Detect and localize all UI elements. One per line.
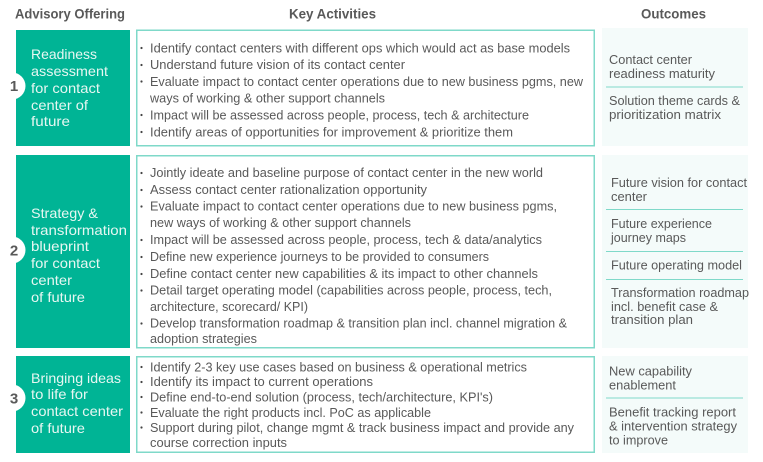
panel: key activities 1: Identify areas of opportunities for improvement & prioritize them xyxy=(150,126,513,140)
panel: key activities 2: Define contact center new capabilities & its impact to other channels xyxy=(150,267,538,281)
heading: outcomes: Outcomes xyxy=(641,6,706,22)
offering title 2: for contact xyxy=(31,255,100,271)
offering title 3: of future xyxy=(31,420,85,436)
panel: outcomes 1: prioritization matrix xyxy=(609,108,722,122)
panel: key activities 2: Develop transformation roadmap & transition plan incl. channel migration & xyxy=(150,316,568,330)
panel: key activities 2: new ways of working & other support channels xyxy=(150,216,411,230)
panel: key activities 3: Support during pilot, change mgmt & track business impact and provide any xyxy=(150,421,575,435)
panel: key activities 1: ways of working & other support channels xyxy=(149,92,385,106)
offering title 1: assessment xyxy=(31,63,108,79)
panel: advisory offering 2 xyxy=(0,155,130,348)
offering title 1: future xyxy=(31,113,70,129)
number 2: 2 xyxy=(10,242,18,260)
heading: advisory offering: Advisory Offering xyxy=(15,6,125,22)
panel: outcomes 2 xyxy=(602,155,749,348)
offering title 2: center xyxy=(31,272,72,288)
offering title 3: Bringing ideas xyxy=(31,370,121,386)
panel: outcomes 2: Future operating model xyxy=(611,258,742,272)
panel: outcomes 2: center xyxy=(611,190,647,204)
panel: outcomes 3: Benefit tracking report xyxy=(609,406,737,420)
offering title 2: blueprint xyxy=(31,238,89,254)
panel: key activities 3: Evaluate the right products incl. PoC as applicable xyxy=(150,406,431,420)
panel: key activities 2: architecture, scorecard/ KPI) xyxy=(150,300,308,314)
offering title 1: center of xyxy=(31,97,88,113)
panel: outcomes 2: Future vision for contact xyxy=(611,176,748,190)
panel: outcomes 1: Solution theme cards & xyxy=(609,94,741,108)
panel: key activities 3: Define end-to-end solution (process, tech/architecture, KPI's) xyxy=(150,390,493,404)
panel: key activities 2: Detail target operating model (capabilities across people, process, tech, xyxy=(150,284,552,298)
offering title 2: transformation xyxy=(31,222,127,238)
panel: outcomes 2: journey maps xyxy=(610,231,686,245)
offering title 1: Readiness xyxy=(31,46,97,62)
panel: key activities 3: Identify its impact to current operations xyxy=(150,375,373,389)
panel: key activities 1: Understand future vision of its contact center xyxy=(150,58,405,72)
panel: key activities 3: Identify 2-3 key use cases based on business & operational metrics xyxy=(150,360,527,374)
heading: key activities: Key Activities xyxy=(289,6,376,22)
panel: key activities 1 xyxy=(137,30,594,146)
panel: outcomes 3: & intervention strategy xyxy=(609,420,738,434)
panel: outcomes 2: Future experience xyxy=(611,217,712,231)
panel: key activities 2: adoption strategies xyxy=(150,332,257,346)
panel: key activities 2: Jointly ideate and baseline purpose of contact center in the new world xyxy=(150,166,543,180)
panel: advisory offering 3 xyxy=(0,356,130,453)
panel: key activities 1: Evaluate impact to contact center operations due to new business pgms, new xyxy=(150,75,584,89)
panel: outcomes 1 xyxy=(602,28,748,146)
panel: outcomes 1: Contact center xyxy=(609,53,692,67)
panel: key activities 3: course correction inputs xyxy=(150,436,287,450)
panel: key activities 1: Impact will be assessed across people, process, tech & architecture xyxy=(150,108,529,122)
panel: outcomes 3: enablement xyxy=(609,378,677,392)
panel: key activities 2: Assess contact center rationalization opportunity xyxy=(150,183,428,197)
panel: key activities 3 xyxy=(137,357,594,452)
panel: key activities 2: Impact will be assessed across people, process, tech & data/analytics xyxy=(150,233,542,247)
number 1: 1 xyxy=(10,78,18,95)
offering title 3: to life for xyxy=(31,386,88,402)
panel: outcomes 1: readiness maturity xyxy=(609,67,716,81)
number 3: 3 xyxy=(10,390,18,408)
offering title 2 xyxy=(31,205,127,305)
panel: outcomes 3: New capability xyxy=(609,364,693,378)
offering title 3 xyxy=(31,370,123,436)
panel: outcomes 3 xyxy=(602,356,748,453)
offering title 1 xyxy=(31,46,108,129)
offering title 2: Strategy & xyxy=(31,205,99,221)
panel: outcomes 2: Transformation roadmap xyxy=(611,286,749,300)
offering title 2: of future xyxy=(31,289,85,305)
offering title 1: for contact xyxy=(31,80,100,96)
panel: outcomes 2: incl. benefit case & xyxy=(611,300,719,314)
panel: outcomes 3: to improve xyxy=(609,434,668,448)
panel: advisory offering 1 xyxy=(0,30,130,146)
panel: key activities 1: Identify contact centers with different ops which would act as base models xyxy=(150,42,570,56)
panel: key activities 2 xyxy=(137,156,594,348)
offering title 3: contact center xyxy=(31,403,123,419)
panel: key activities 2: Evaluate impact to contact center operations due to new business pgms, xyxy=(150,200,557,214)
panel: key activities 2: Define new experience journeys to be provided to consumers xyxy=(150,250,489,264)
panel: outcomes 2: transition plan xyxy=(611,313,693,327)
